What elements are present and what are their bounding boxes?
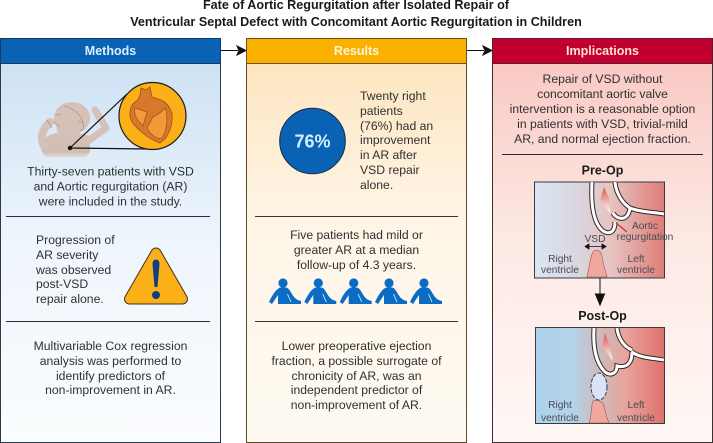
label: aortic regurgitation: regurgitation xyxy=(617,232,673,243)
septum xyxy=(589,400,609,423)
text: progression xyxy=(35,233,115,306)
label: right ventricle: ventricle xyxy=(541,265,579,276)
arrow: results to implications xyxy=(467,46,492,55)
text: cox regression xyxy=(34,339,187,397)
methods header: Methods xyxy=(85,44,136,58)
results header xyxy=(246,38,466,64)
label: left ventricle: ventricle xyxy=(617,413,655,424)
text: progression: Progression of xyxy=(36,233,115,247)
label: left ventricle: Left xyxy=(628,254,645,265)
text: cox regression: analysis was performed to xyxy=(40,354,182,368)
label: right ventricle: ventricle xyxy=(541,413,579,424)
stat: 76% circle xyxy=(280,108,345,174)
title: Ventricular Septal Defect with Concomitant Aortic Regurgitation in Children xyxy=(130,15,582,29)
text: cox regression: Multivariable Cox regression xyxy=(34,339,187,353)
label: right ventricle xyxy=(541,254,579,276)
text: follow-up: Five patients had mild or xyxy=(290,228,423,242)
text: predictor: Lower preoperative ejection xyxy=(282,339,431,353)
text: predictor: fraction, a possible surrogate of xyxy=(271,354,442,368)
text: progression: repair alone. xyxy=(36,292,104,306)
text: patients included: Thirty-seven patients with VSD xyxy=(27,164,194,178)
label: right ventricle: Right xyxy=(548,400,572,411)
text: predictor xyxy=(271,339,442,412)
text: follow-up: greater AR at a median xyxy=(294,243,419,257)
label: left ventricle xyxy=(617,400,655,424)
text: patients included: were included in the study. xyxy=(38,194,182,208)
text: patients included: and Aortic regurgitation (AR) xyxy=(34,180,187,194)
text: conclusion: Repair of VSD without xyxy=(543,72,663,86)
diagram: post-op heart xyxy=(536,328,664,424)
methods header xyxy=(0,38,220,64)
text: improvement: (76%) had an xyxy=(360,119,433,133)
label: right ventricle: Right xyxy=(548,254,572,265)
patch xyxy=(591,373,607,400)
label: aortic regurgitation xyxy=(617,221,673,243)
label: right ventricle xyxy=(541,400,579,424)
icon: heart in circle xyxy=(119,82,186,150)
heading: pre-op: Pre-Op xyxy=(582,164,624,178)
pointer dot xyxy=(68,146,72,150)
stat: 76% circle: 76% xyxy=(294,132,331,152)
text: improvement: alone. xyxy=(360,178,393,192)
icons: five seated children xyxy=(269,278,442,304)
implications header: Implications xyxy=(566,44,639,58)
arrow: pre-op to post-op xyxy=(596,278,604,305)
implications header xyxy=(492,38,712,64)
pointer lines xyxy=(70,94,148,149)
text: progression: post-VSD xyxy=(36,277,88,291)
text: predictor: chronicity of AR, was an xyxy=(291,369,422,383)
text: conclusion: concomitant aortic valve xyxy=(537,87,668,101)
panel: implications xyxy=(492,38,712,442)
label: left ventricle: Left xyxy=(628,400,645,411)
arrow: VSD width xyxy=(585,244,606,249)
title xyxy=(130,0,582,29)
icon: infant xyxy=(41,102,106,157)
icon: warning triangle xyxy=(130,253,182,299)
text: improvement: VSD repair xyxy=(360,163,420,177)
text: follow-up: follow-up of 4.3 years. xyxy=(297,258,416,272)
text: improvement: in AR after xyxy=(360,148,417,162)
label: left ventricle xyxy=(617,254,655,276)
text: cox regression: identify predictors of xyxy=(56,369,166,383)
text: progression: AR severity xyxy=(36,248,99,262)
text: improvement xyxy=(360,89,433,192)
results header: Results xyxy=(334,44,379,58)
text: follow-up xyxy=(290,228,423,272)
label: left ventricle: ventricle xyxy=(617,265,655,276)
text: predictor: independent predictor of xyxy=(291,383,423,397)
panel: results xyxy=(246,38,466,442)
text: improvement: improvement xyxy=(360,133,431,147)
text: patients included xyxy=(27,164,194,208)
label: aortic regurgitation: Aortic xyxy=(632,221,658,232)
text: progression: was observed xyxy=(35,263,111,277)
text: conclusion: in patients with VSD, trivial-mild xyxy=(517,117,688,131)
text: conclusion xyxy=(510,72,695,146)
heading: post-op: Post-Op xyxy=(578,309,627,323)
text: conclusion: intervention is a reasonable option xyxy=(510,102,695,116)
text: predictor: non-improvement of AR. xyxy=(291,398,422,412)
text: cox regression: non-improvement in AR. xyxy=(45,383,176,397)
panel: methods xyxy=(0,38,220,442)
text: improvement: patients xyxy=(360,104,403,118)
text: improvement: Twenty right xyxy=(360,89,426,103)
label: VSD: VSD xyxy=(585,234,605,245)
septum xyxy=(587,250,607,277)
text: conclusion: AR, and normal ejection fraction. xyxy=(514,132,691,146)
arrow: methods to results xyxy=(221,46,246,55)
diagram: pre-op heart xyxy=(534,182,673,278)
